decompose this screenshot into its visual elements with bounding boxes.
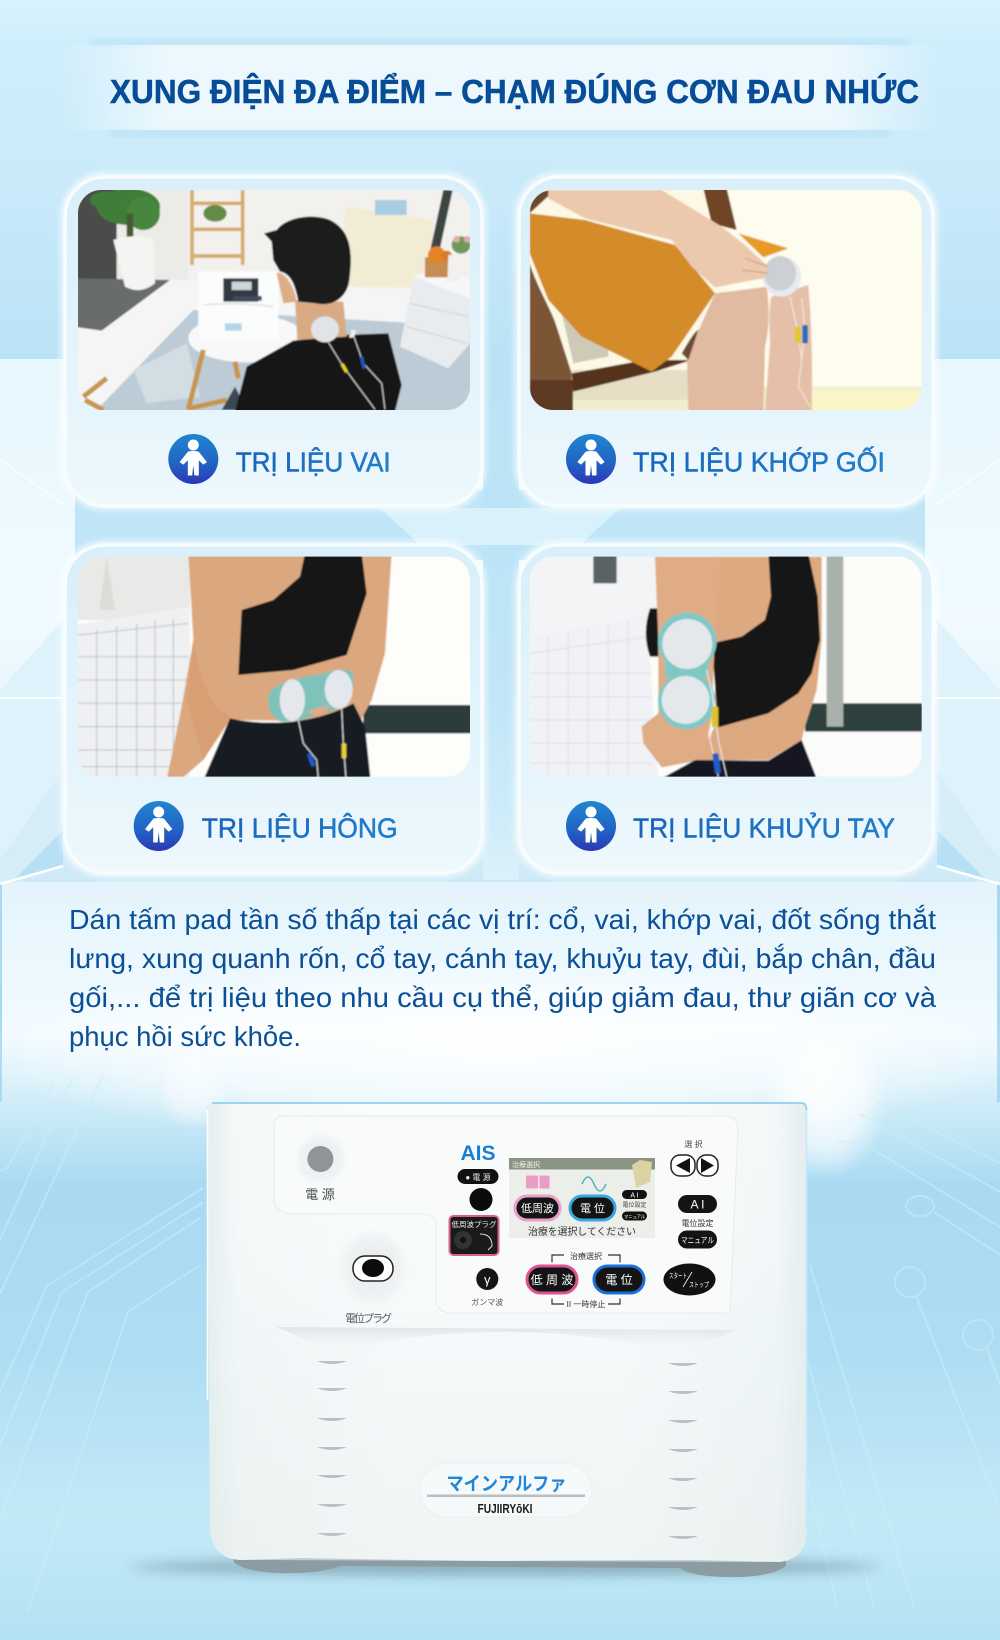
brand plate: FUJIIRYōKI (478, 1501, 532, 1516)
photo: lower back with pads (73, 553, 473, 780)
label: TRỊ LIỆU KHỚP GỐI (633, 446, 885, 478)
ledge (276, 1327, 737, 1355)
label: TRỊ LIỆU HÔNG (202, 813, 398, 844)
vents (317, 1361, 698, 1539)
left controls: ● 電 源 (465, 1173, 491, 1182)
description paragraph: Dán tấm pad tần số thấp tại các vị trí: cổ, vai, khớp vai, đốt sống thắt (69, 904, 936, 935)
select buttons (671, 1139, 718, 1176)
description paragraph (69, 904, 936, 1052)
control panel outline (274, 1116, 738, 1313)
icon: body hip (134, 801, 184, 851)
description paragraph: phục hồi sức khỏe. (69, 1021, 301, 1052)
icon: body knee (566, 434, 616, 484)
AI and manual buttons: A I (690, 1198, 705, 1212)
left controls (450, 1169, 503, 1307)
AI and manual buttons (678, 1195, 717, 1248)
LCD screen: 電位設定 (622, 1201, 647, 1209)
title: XUNG ĐIỆN ĐA ĐIỂM – CHẠM ĐÚNG CƠN ĐAU NHỨC (110, 73, 919, 110)
label: TRỊ LIỆU KHUỶU TAY (633, 812, 895, 844)
device body (207, 1103, 807, 1562)
start stop button (664, 1264, 716, 1296)
photo: knee with pad (525, 187, 925, 413)
therapy buttons: II 一時停止 (567, 1299, 605, 1309)
brand plate: マインアルファ (446, 1474, 566, 1495)
panel: knee therapy (518, 176, 934, 507)
panel: elbow therapy (518, 544, 934, 874)
LCD screen: 電 位 (580, 1202, 605, 1215)
LCD screen: 低周波 (521, 1202, 554, 1215)
left controls: 低周波プラグ (452, 1219, 497, 1229)
plug socket: 電位プラグ (345, 1311, 392, 1325)
therapy buttons: 電 位 (605, 1273, 633, 1287)
therapy buttons (527, 1251, 644, 1309)
icon: body shoulder (168, 434, 218, 484)
start stop button: スタート (669, 1271, 687, 1280)
LCD screen: マニュアル (624, 1214, 645, 1220)
description paragraph: gối,... để trị liệu theo nhu cầu cụ thể, giúp giảm đau, thư giãn cơ và (69, 982, 936, 1013)
circuit lines (0, 1075, 1000, 1612)
AI and manual buttons: マニュアル (681, 1236, 714, 1245)
left controls: γ (484, 1272, 491, 1287)
panel: shoulder therapy (64, 176, 483, 507)
plug socket (333, 1224, 413, 1325)
AI and manual buttons: 電位設定 (682, 1218, 714, 1228)
photo: man with pad on neck (73, 187, 473, 413)
description paragraph: lưng, xung quanh rốn, cổ tay, cánh tay, khuỷu tay, đùi, bắp chân, đầu (69, 943, 936, 974)
power button (290, 1129, 350, 1202)
device shadow (130, 1559, 880, 1575)
select buttons: 選 択 (684, 1139, 703, 1149)
AIS logo: AIS (460, 1142, 496, 1165)
title banner (60, 38, 940, 137)
device base (232, 1550, 786, 1577)
LCD screen: 治療選択 (512, 1160, 540, 1169)
label: TRỊ LIỆU VAI (236, 447, 391, 478)
therapy buttons: 治療選択 (570, 1251, 602, 1261)
device: electrotherapy machine (130, 1103, 880, 1577)
icon: body elbow (566, 801, 616, 851)
start stop button: ストップ (689, 1281, 709, 1289)
power button: 電 源 (305, 1187, 335, 1202)
LCD screen (509, 1158, 655, 1238)
therapy buttons: 低 周 波 (531, 1273, 573, 1287)
panel: hip therapy (64, 544, 483, 874)
LCD screen: A I (630, 1192, 639, 1200)
photo: upper arm with pads (525, 553, 925, 782)
LCD screen: 治療を選択してください (528, 1225, 636, 1238)
left controls: ガンマ波 (471, 1297, 503, 1307)
brand plate (420, 1463, 592, 1517)
